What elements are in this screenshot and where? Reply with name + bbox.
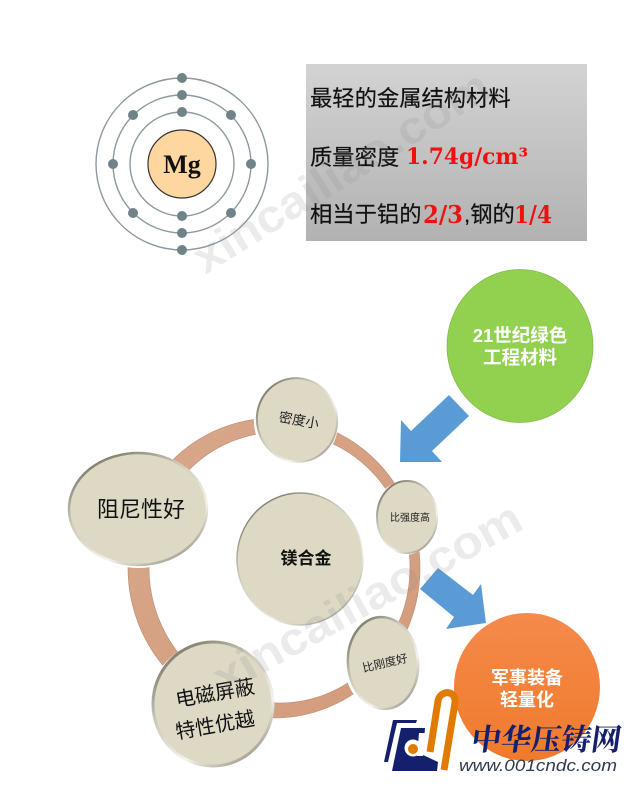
circle: military lightweighting: 轻量化 xyxy=(500,689,554,710)
circle: low density: 密度小 xyxy=(278,409,321,431)
circle: low density xyxy=(244,369,348,475)
arrow: specific strength to military use xyxy=(420,568,486,629)
text: relative to aluminium and steel: 相当于铝的 xyxy=(310,202,422,227)
circle: electromagnetic shielding: 电磁屏蔽 xyxy=(174,675,256,712)
atom diagram: Mg xyxy=(96,73,268,255)
logo: China die casting network xyxy=(384,693,625,775)
circle: magnesium alloy centre xyxy=(235,492,365,628)
watermark: upper: xincailiao.com xyxy=(183,59,499,283)
panel: magnesium properties xyxy=(306,64,587,241)
text: density: 质量密度 xyxy=(310,145,399,170)
text: relative to aluminium and steel: 2/3 xyxy=(423,200,463,229)
arrow: green material to specific strength xyxy=(400,395,469,462)
logo mark xyxy=(384,693,455,771)
watermark: lower: xincailiao.com xyxy=(204,491,531,704)
circle: green engineering material: 21世纪绿色 xyxy=(473,325,567,346)
circle: electromagnetic shielding xyxy=(149,642,273,770)
text: density xyxy=(310,144,528,170)
circle: good damping xyxy=(67,452,209,568)
logo name: 中华压铸网 xyxy=(469,715,625,759)
nucleus: Mg xyxy=(163,150,201,179)
circle: electromagnetic shielding: 特性优越 xyxy=(174,707,256,744)
circle: magnesium alloy centre: 镁合金 xyxy=(280,548,332,568)
circle: good specific stiffness xyxy=(340,614,422,714)
text: relative to aluminium and steel: 1/4 xyxy=(514,200,552,229)
logo url: www.001cndc.com xyxy=(459,756,617,775)
text: lightest structural metal: 最轻的金属结构材料 xyxy=(310,86,511,111)
circle: green engineering material xyxy=(447,270,593,422)
circle: high specific strength xyxy=(373,481,437,555)
circle: good specific stiffness: 比刚度好 xyxy=(361,651,409,675)
ring connecting the properties xyxy=(128,418,420,718)
text: relative to aluminium and steel xyxy=(310,200,552,229)
circle: military lightweighting xyxy=(454,613,600,761)
text: relative to aluminium and steel: ,钢的 xyxy=(464,202,515,227)
circle: good damping: 阻尼性好 xyxy=(97,497,185,522)
circle: high specific strength: 比强度高 xyxy=(390,511,430,524)
circle: military lightweighting: 军事装备 xyxy=(491,668,563,688)
text: density: 1.74g/cm³ xyxy=(406,144,528,170)
nucleus xyxy=(148,130,216,198)
circle: green engineering material: 工程材料 xyxy=(483,347,557,368)
